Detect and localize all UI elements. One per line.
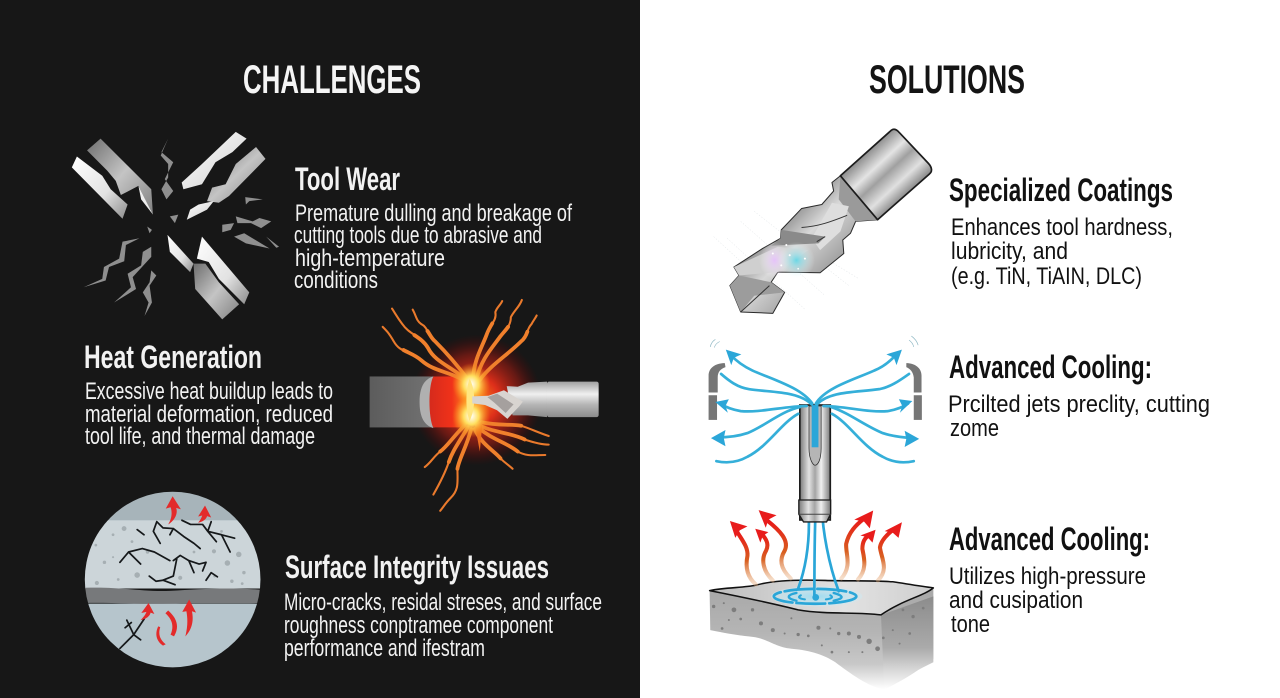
text block: specialized coatings: (e.g. TiN, TiAIN, DLC): [951, 263, 1142, 290]
text block: advanced cooling pressure: tone: [951, 611, 990, 638]
text block: advanced cooling jets: Prcilted jets preclity, cutting: [948, 391, 1210, 418]
text block: advanced cooling pressure: Advanced Cooling:: [949, 521, 1150, 557]
icon: surface cross-section: [84, 490, 263, 669]
panel: challenges: [0, 0, 640, 698]
text block: surface integrity issues: Micro-cracks, residal streses, and surface: [284, 589, 602, 616]
text block: heat generation: [84, 339, 333, 450]
text block: specialized coatings: lubricity, and: [951, 238, 1068, 265]
icon: coolant spray on workpiece: [710, 500, 933, 689]
text block: tool wear: Premature dulling and breakage of: [295, 200, 572, 227]
text block: tool wear: Tool Wear: [295, 161, 400, 197]
text block: surface integrity issues: performance and ifestram: [284, 635, 485, 662]
text block: advanced cooling pressure: [949, 521, 1150, 638]
text block: advanced cooling pressure: and cusipation: [949, 587, 1083, 614]
heading: challenges: CHALLENGES: [243, 58, 421, 102]
icon: coated drill: [714, 129, 931, 313]
text block: surface integrity issues: roughness conptramee component: [284, 612, 553, 639]
text block: heat generation: Heat Generation: [84, 339, 262, 375]
text block: advanced cooling jets: [948, 349, 1210, 442]
text block: specialized coatings: Specialized Coatings: [949, 172, 1173, 208]
text block: surface integrity issues: Surface Integrity Issuaes: [285, 549, 549, 585]
text block: specialized coatings: Enhances tool hardness,: [951, 214, 1173, 241]
heading: solutions: SOLUTIONS: [869, 58, 1025, 102]
text block: heat generation: tool life, and thermal damage: [85, 423, 315, 450]
text block: specialized coatings: [949, 172, 1173, 290]
text block: tool wear: cutting tools due to abrasive and: [294, 222, 542, 249]
text block: tool wear: [294, 161, 572, 294]
text block: surface integrity issues: [284, 549, 602, 662]
icon: overheating drill: [370, 300, 599, 511]
text block: tool wear: high-temperature: [295, 245, 445, 272]
panel: solutions: [640, 0, 1280, 698]
text block: heat generation: material deformation, reduced: [85, 401, 333, 428]
icon: shattered tool: [72, 132, 279, 319]
icon: cooling jets from tool: [709, 336, 922, 520]
text block: tool wear: conditions: [294, 267, 378, 294]
text block: advanced cooling jets: Advanced Cooling:: [949, 349, 1152, 385]
text block: heat generation: Excessive heat buildup leads to: [85, 378, 333, 405]
text block: advanced cooling pressure: Utilizes high-pressure: [949, 563, 1146, 590]
text block: advanced cooling jets: zome: [950, 415, 999, 442]
